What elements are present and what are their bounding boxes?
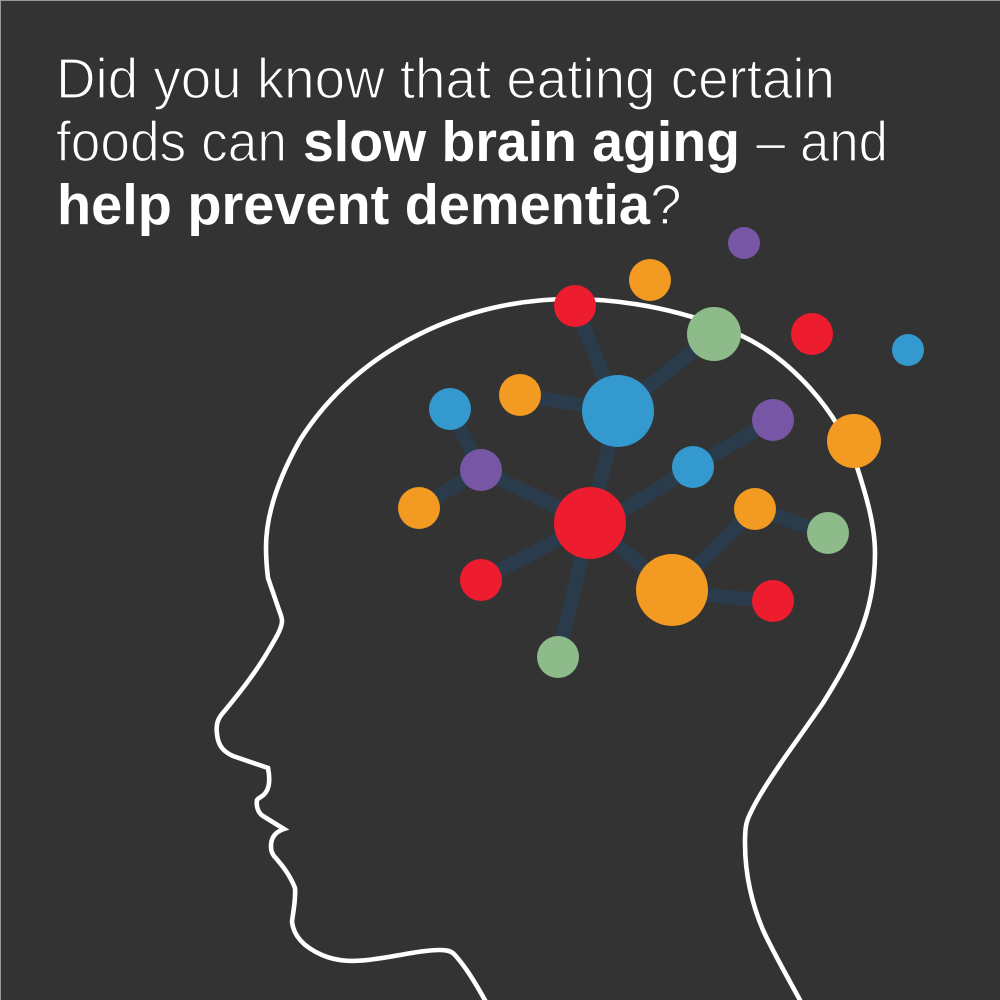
title [56,47,888,237]
brain network nodes [398,285,849,678]
title: ? [650,173,682,237]
title: slow brain aging [303,110,740,174]
title: Did you know that eating certain [56,47,835,111]
title: help prevent dementia [57,173,651,237]
title: – and [756,110,888,174]
floating nodes outside head [629,227,924,468]
title: foods can [56,110,287,174]
network connections [419,306,828,657]
head outline [217,299,875,1000]
